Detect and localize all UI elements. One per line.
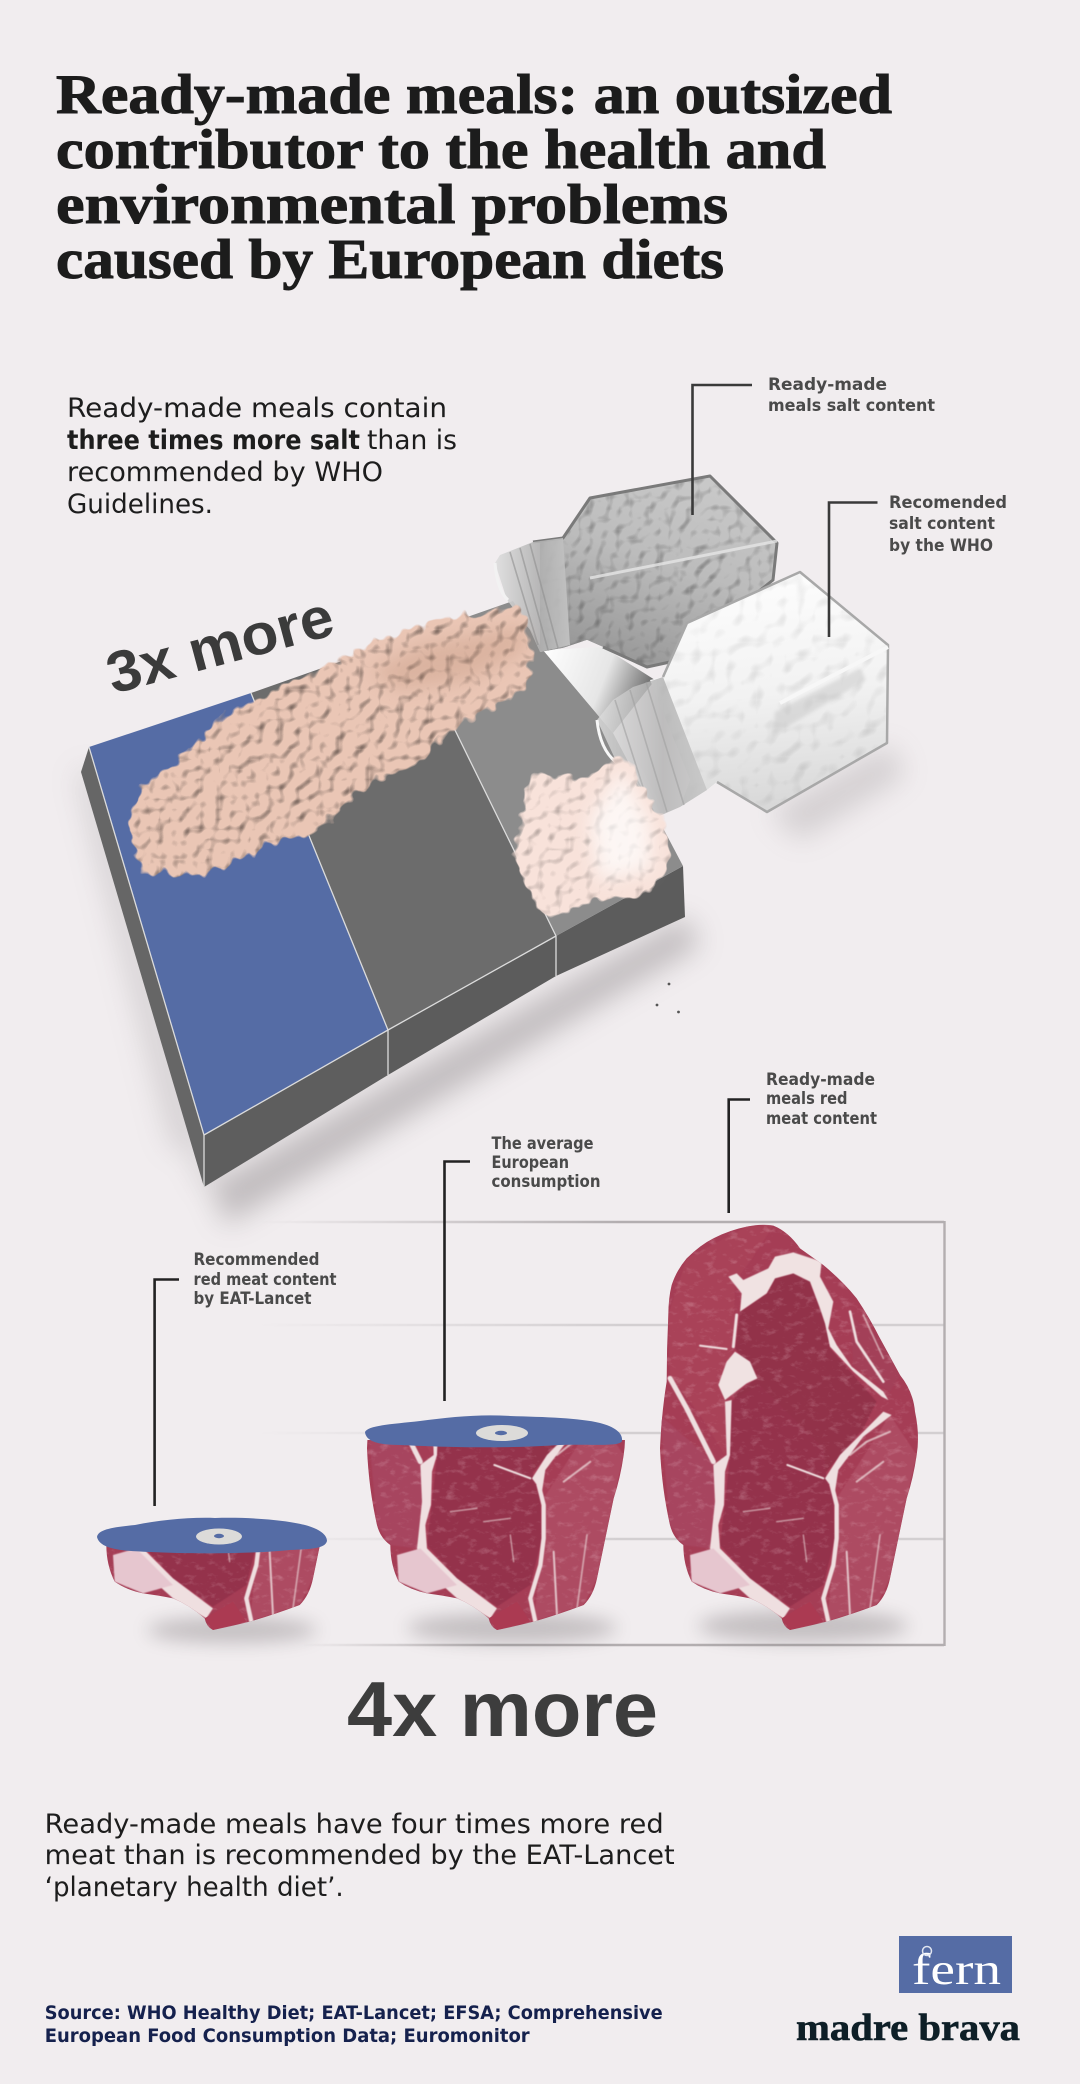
title: caused by European diets <box>56 229 724 291</box>
gap between plate and bottles <box>543 647 655 733</box>
bone ring <box>476 1425 528 1441</box>
meat shadows <box>147 1610 908 1643</box>
salt chart: 3D plate <box>81 601 685 1187</box>
callout: ready-made red meat: meals red <box>766 1089 848 1108</box>
callout: recommended salt content <box>829 493 1007 637</box>
callout: recommended red meat <box>155 1250 337 1506</box>
heading: 3x more: 3x more <box>100 584 340 707</box>
plate segment: blue recommended share <box>89 693 388 1135</box>
meat: recommended portion <box>97 1518 327 1630</box>
source note <box>45 2002 663 2047</box>
callout: recommended salt content: Recomended <box>889 493 1007 512</box>
plate edge highlights <box>89 693 556 1187</box>
callout: average consumption: The average <box>492 1134 594 1153</box>
bottle shadow <box>770 745 905 840</box>
callout: ready-made meals salt content: Ready-made <box>768 375 887 394</box>
source note: Source: WHO Healthy Diet; EAT-Lancet; EFSA; Comprehensive <box>45 2002 663 2024</box>
plate side faces <box>81 747 685 1187</box>
stray salt specks <box>656 983 680 1013</box>
callout: average consumption <box>444 1134 600 1401</box>
plate segment: mid grey <box>251 637 556 1030</box>
callout: average consumption: European <box>492 1153 569 1172</box>
callout: average consumption: consumption <box>492 1172 600 1191</box>
white salt pouring from bottle <box>513 751 672 922</box>
meat: average European consumption <box>365 1415 625 1630</box>
meat: ready-made meals portion <box>650 1215 930 1645</box>
pink salt pouring over plate <box>127 601 533 874</box>
heading: 4x more: 4x more <box>347 1665 658 1753</box>
meat chart: grid frame <box>258 1221 944 1646</box>
logo: fern: fern <box>912 1945 1001 1994</box>
text block: salt statement: Guidelines. <box>67 489 213 520</box>
title <box>56 64 892 291</box>
icon: white salt bottle <box>597 572 888 817</box>
text block: salt statement: three times more salt <box>67 425 360 456</box>
blue cut surface <box>97 1518 327 1553</box>
callout: ready-made red meat <box>729 1070 877 1213</box>
callout: ready-made meals salt content <box>692 375 935 515</box>
blue cut surface <box>365 1415 622 1447</box>
bottle neck glass <box>597 677 707 817</box>
title: Ready-made meals: an outsized <box>56 64 892 126</box>
text block: red meat statement: Ready-made meals have four times more red <box>45 1809 664 1840</box>
text block: salt statement: Ready-made meals contain <box>67 393 447 424</box>
title: environmental problems <box>56 174 728 236</box>
logo: madre brava: madre brava <box>796 2007 1020 2049</box>
callout: recommended salt content: by the WHO <box>889 536 993 555</box>
text block: salt statement: recommended by WHO <box>67 457 383 488</box>
text block: red meat statement: ‘planetary health diet’. <box>45 1872 344 1903</box>
callout: ready-made meals salt content: meals salt content <box>768 396 935 415</box>
bottle neck glass <box>495 538 570 652</box>
salt chart: plate shadow <box>75 770 700 1225</box>
callout: ready-made red meat: Ready-made <box>766 1070 875 1089</box>
source note: European Food Consumption Data; Euromonitor <box>45 2025 530 2047</box>
bone ring <box>196 1528 242 1544</box>
callout: recommended red meat: red meat content <box>194 1270 337 1289</box>
logo: fern <box>899 1936 1012 1994</box>
title: contributor to the health and <box>56 119 826 181</box>
callout: ready-made red meat: meat content <box>766 1109 877 1128</box>
text block: salt statement: than is <box>367 425 457 456</box>
callout: recommended red meat: Recommended <box>194 1250 320 1269</box>
plate segment: light grey <box>410 601 683 936</box>
callout: recommended red meat: by EAT-Lancet <box>194 1289 312 1308</box>
text block: red meat statement: meat than is recommended by the EAT-Lancet <box>45 1840 675 1871</box>
callout: recommended salt content: salt content <box>889 514 995 533</box>
icon: dark salt bottle <box>495 476 777 667</box>
text block: salt statement <box>67 393 457 520</box>
text block: red meat statement <box>45 1809 675 1903</box>
